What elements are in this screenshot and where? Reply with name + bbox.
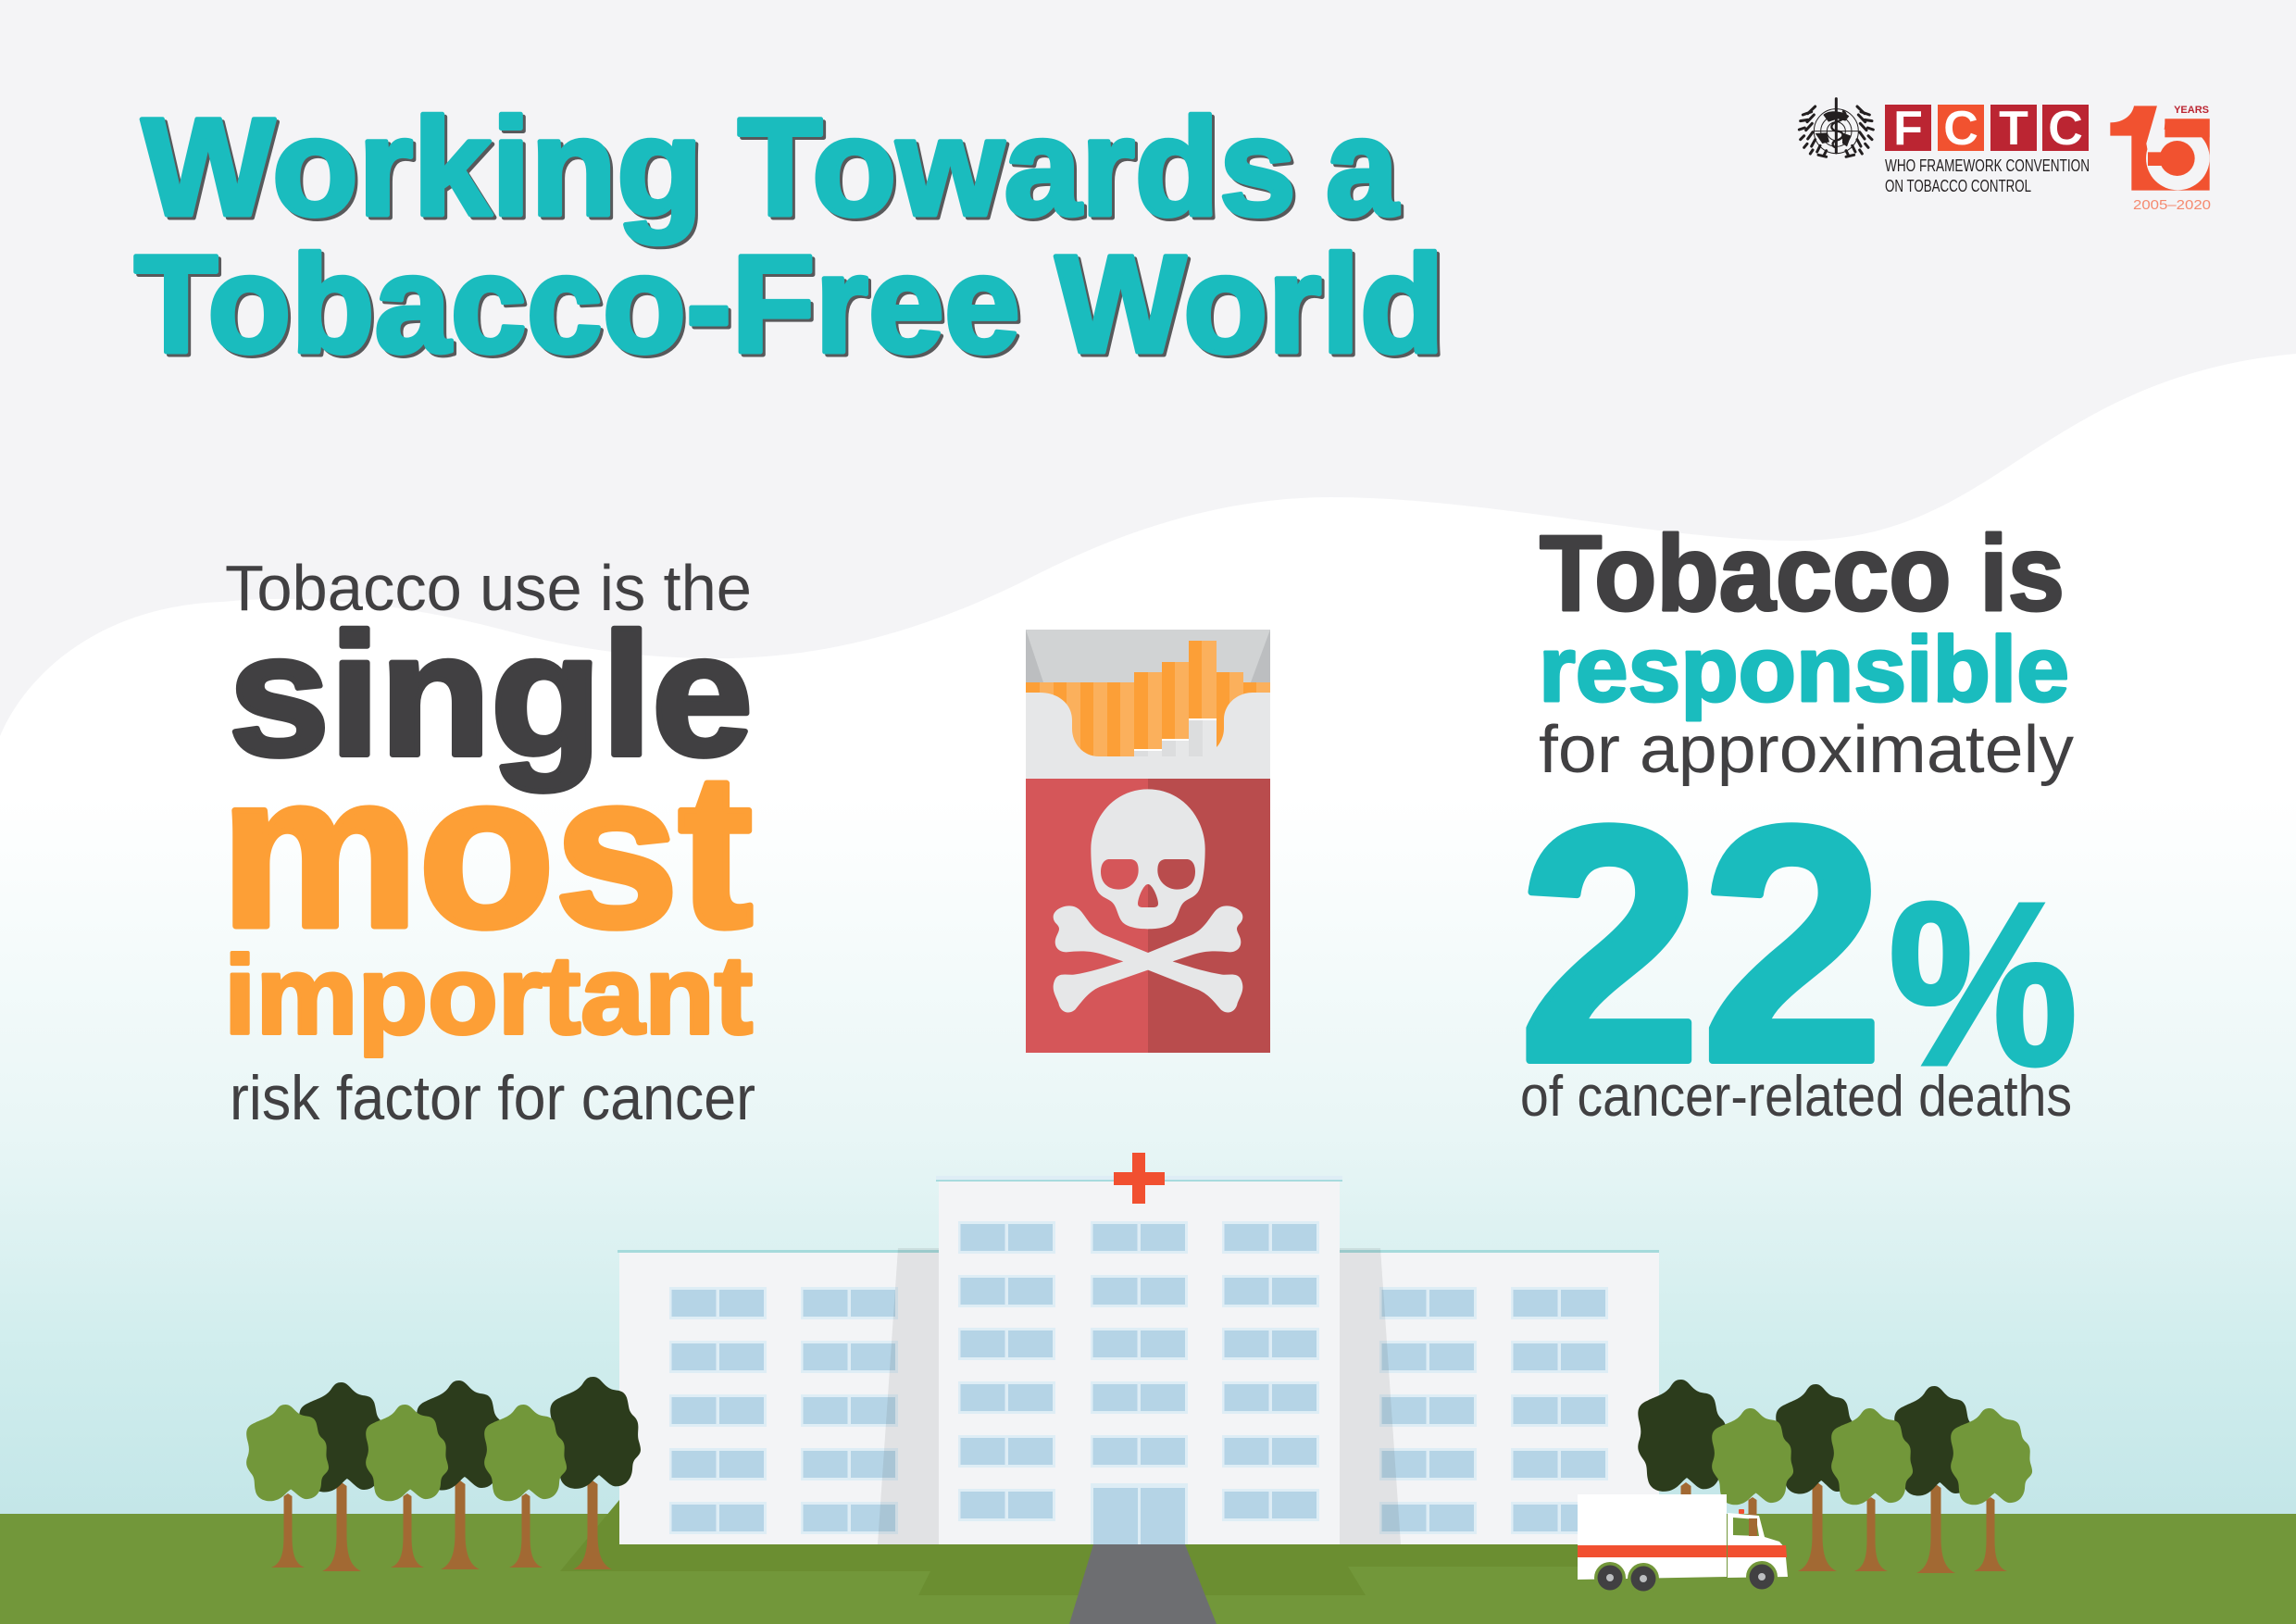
left text block [220,552,755,1133]
trees left [246,1377,641,1571]
right text block: for approximately [1539,713,2074,787]
ground shadow [560,1500,1666,1595]
logo: 15 years: 2005–2020 [2133,197,2211,213]
right text block: responsible [1539,618,2069,721]
logo: FCTC [1885,102,2090,195]
ambulance [1578,1494,1788,1594]
title: Working [142,89,703,244]
icon: red cross [1114,1153,1165,1204]
logo: FCTC: C [2048,102,2083,156]
right text block: % [1889,855,2078,1113]
logo: FCTC: WHO FRAMEWORK CONVENTION [1885,156,2090,175]
left text block: important [224,933,753,1057]
title: Towards [738,89,1296,244]
left text block: Tobacco use is the [225,552,752,624]
logo: 15 years [2110,105,2211,213]
logo: FCTC: C [1943,102,1978,156]
hospital [618,1153,1659,1544]
logo: 15 years: YEARS [2174,105,2209,116]
ground [0,1514,2296,1624]
right text block [1518,513,2078,1131]
icon: cigarette pack [1026,630,1270,1053]
hospital left wing [618,1250,942,1544]
logo: WHO emblem [1799,99,1873,156]
logo: FCTC: ON TOBACCO CONTROL [1885,177,2031,195]
hospital central block [936,1176,1342,1544]
right text block: of cancer-related deaths [1520,1065,2072,1129]
logo: FCTC: T [1999,102,2028,156]
title: a [1326,89,1399,244]
title [134,89,1444,381]
road [1069,1544,1217,1624]
hospital right wing [1338,1250,1659,1544]
left text block: risk factor for cancer [230,1063,755,1133]
right text block: Tobacco is [1540,513,2065,633]
left text block: most [220,729,753,973]
trees right [1638,1380,2032,1573]
title: Tobacco-Free [134,226,1020,381]
right text block: 22 [1518,756,1884,1131]
logo: FCTC: F [1893,102,1923,156]
title: World [1055,226,1444,381]
left text block: single [229,597,753,792]
